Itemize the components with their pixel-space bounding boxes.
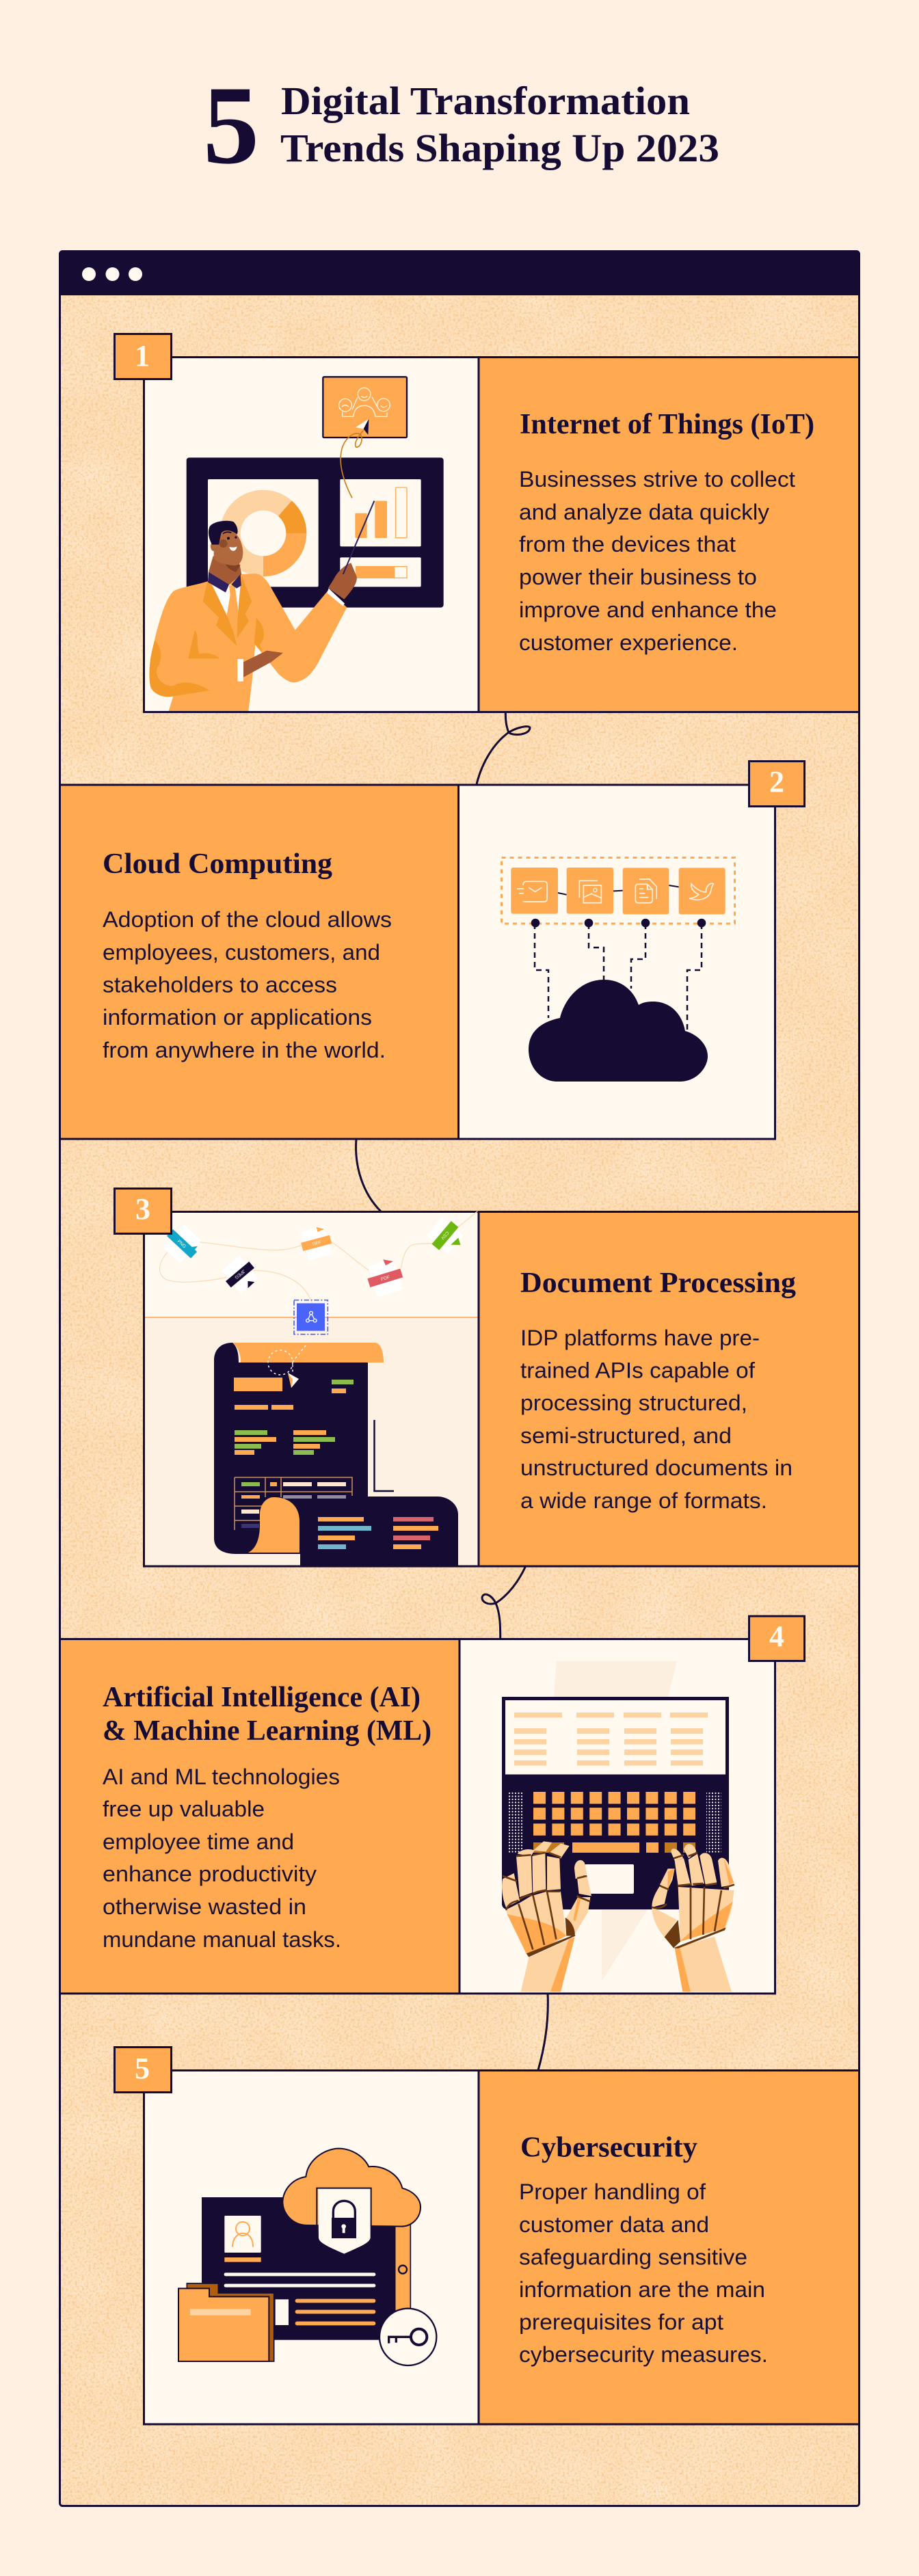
badge 4: 4 (769, 1620, 784, 1653)
progress bar (356, 567, 407, 578)
title line 1: Digital Transformation (281, 79, 690, 123)
card 5 body text (519, 2179, 768, 2367)
badge 1: 1 (135, 339, 150, 373)
card 3 body text: unstructured documents in (520, 1455, 793, 1480)
collar (208, 572, 241, 593)
card 2 heading: Cloud Computing (103, 848, 332, 880)
keyboard keys (533, 1792, 695, 1853)
dotted selection and cursor (268, 1345, 306, 1388)
card 3 body text: semi-structured, and (520, 1423, 732, 1448)
illustration: security tablet, cloud, folder and key (178, 2149, 436, 2365)
folder (178, 2283, 274, 2361)
laptop screen (505, 1700, 725, 1775)
illustration: presenter at dashboard (149, 377, 444, 711)
window title bar (59, 250, 860, 295)
dashed cloud links (535, 924, 702, 1032)
card 1 body text: customer experience. (519, 630, 738, 655)
card 4 heading: Artificial Intelligence (AI) (103, 1682, 421, 1713)
jacket (149, 574, 347, 711)
key badge (379, 2309, 436, 2365)
panel: card 2 Cloud Computing (60, 762, 804, 1139)
bottom colour bars (318, 1517, 438, 1549)
browser window panel (59, 250, 860, 2506)
illustration: file tags (159, 1211, 477, 1334)
window control dots (82, 267, 142, 281)
pointing hand (328, 563, 357, 600)
title (203, 64, 719, 187)
tag: TIFF: TIFF (311, 1240, 322, 1247)
icon: mail (511, 868, 558, 914)
left robot hand (502, 1841, 591, 1991)
card 5 body text: safeguarding sensitive (519, 2245, 747, 2270)
cloud with shield (282, 2149, 421, 2254)
card 1 text panel (479, 357, 859, 712)
panel: card 5 Cybersecurity (115, 2047, 859, 2424)
card 1 body text: power their business to (519, 565, 757, 589)
paper plane (356, 419, 369, 435)
pointer stick (343, 501, 374, 574)
card 5 illustration area (144, 2070, 479, 2424)
faces icon box (323, 377, 407, 438)
tag: PNG (159, 1221, 204, 1266)
tag connection paths (160, 1211, 477, 1304)
card 1 body text (519, 467, 795, 655)
badge 5 (115, 2047, 171, 2092)
card 5 body text: Proper handling of (519, 2179, 706, 2204)
card 2 body text: Adoption of the cloud allows (103, 907, 392, 932)
card 5 body text: information are the main (519, 2277, 765, 2302)
card 4 illustration area (460, 1639, 775, 1994)
blue processing icon (294, 1300, 328, 1334)
trackpad (585, 1864, 634, 1894)
card 3 body text: processing structured, (520, 1391, 747, 1415)
card 1 illustration area (144, 357, 479, 712)
profile card (224, 2216, 261, 2262)
card 1 heading: Internet of Things (IoT) (520, 409, 814, 440)
card 2 body text: from anywhere in the world. (103, 1038, 386, 1062)
card 4 body text: employee time and (103, 1829, 294, 1854)
tablet (202, 2197, 410, 2340)
card 3 illustration area (144, 1211, 479, 1566)
title line 2: Trends Shaping Up 2023 (280, 126, 719, 170)
card 2 text panel (60, 785, 458, 1139)
tag: CSV: CSV (440, 1230, 449, 1241)
card 4 body text: mundane manual tasks. (103, 1927, 341, 1952)
card 5 body text: cybersecurity measures. (519, 2342, 768, 2367)
corner guide line (375, 1420, 394, 1491)
neck (209, 556, 241, 585)
card 3 body text: trained APIs capable of (520, 1358, 755, 1382)
text lines on tablet (224, 2272, 375, 2325)
dashboard board (187, 457, 444, 608)
icon: image (567, 868, 613, 914)
link lines between app icons (558, 885, 679, 895)
flight path (341, 430, 364, 498)
cloud (529, 980, 708, 1082)
bar chart (355, 487, 407, 538)
donut chart (220, 490, 306, 576)
dashed app frame (502, 857, 734, 924)
jacket shading (149, 576, 264, 697)
badge 3: 3 (135, 1192, 150, 1226)
card 2 body text (103, 907, 392, 1062)
card 3 text panel (479, 1211, 859, 1566)
illustration: apps connected to cloud (502, 857, 734, 1082)
card 5 heading: Cybersecurity (520, 2132, 697, 2163)
lightning backdrop (554, 1661, 677, 1981)
card 4 body text: free up valuable (103, 1797, 265, 1821)
title numeral: 5 (203, 64, 259, 187)
card 2 body text: information or applications (103, 1005, 372, 1030)
card 3 body text: a wide range of formats. (520, 1488, 767, 1513)
tag: PNG: PNG (176, 1239, 187, 1249)
card 4 body text: enhance productivity (103, 1862, 317, 1886)
shirt and tie (212, 585, 241, 617)
speaker dots (508, 1792, 721, 1853)
card 1 body text: from the devices that (519, 532, 736, 556)
head (211, 528, 243, 565)
icon: twitter bird (679, 868, 725, 914)
card 1 body text: Businesses strive to collect (519, 467, 795, 492)
card 1 body text: and analyze data quickly (519, 500, 769, 524)
panel: card 4 AI and ML (60, 1616, 804, 1994)
card 4 heading (103, 1682, 431, 1747)
card 4 body text (103, 1765, 341, 1952)
badge 2 (749, 762, 804, 807)
panel: card 1 Internet of Things (115, 334, 859, 712)
connector lines between cards (356, 712, 548, 2070)
badge 5: 5 (135, 2052, 150, 2085)
tag: JPEG (219, 1253, 262, 1296)
card 3 body text: IDP platforms have pre- (520, 1326, 760, 1350)
tag: CSV (425, 1215, 468, 1259)
card 5 text panel (479, 2070, 859, 2424)
bottom scroll curl (248, 1497, 299, 1553)
card 2 body text: employees, customers, and (103, 940, 380, 965)
card 4 heading: & Machine Learning (ML) (103, 1715, 431, 1747)
badge 2: 2 (769, 765, 784, 799)
tag: PDF: PDF (380, 1275, 390, 1282)
card 3 body text (520, 1326, 793, 1513)
presenter figure (149, 501, 374, 711)
card 5 body text: prerequisites for apt (519, 2309, 723, 2334)
table (235, 1477, 352, 1530)
link dots (531, 919, 706, 927)
screen table rows (514, 1713, 708, 1765)
hair (209, 521, 238, 545)
badge 1 (115, 334, 171, 379)
open hand (243, 651, 283, 677)
right robot hand (652, 1844, 734, 1991)
tag: TIFF (298, 1224, 334, 1261)
illustration: robot hands on laptop (502, 1661, 734, 1991)
eyes and smile (227, 537, 230, 539)
scroll top curl (232, 1343, 384, 1363)
tag: PDF (364, 1256, 406, 1298)
card 3 heading: Document Processing (520, 1267, 796, 1299)
badge 4 (749, 1616, 804, 1661)
tag: JPEG: JPEG (234, 1268, 245, 1280)
card 4 body text: otherwise wasted in (103, 1894, 306, 1919)
card 4 text panel (60, 1639, 460, 1994)
illustration: document scroll (214, 1343, 458, 1566)
card 2 body text: stakeholders to access (103, 972, 337, 997)
panel: card 3 Document Processing (115, 1188, 859, 1566)
icon: documents (623, 868, 669, 914)
card 1 body text: improve and enhance the (519, 598, 777, 622)
badge 3 (115, 1188, 171, 1233)
card 5 body text: customer data and (519, 2212, 709, 2237)
card 2 illustration area (458, 785, 775, 1139)
card 4 body text: AI and ML technologies (103, 1765, 340, 1789)
laptop (502, 1697, 729, 1909)
scroll body (214, 1343, 458, 1566)
document content bars (234, 1378, 346, 1455)
